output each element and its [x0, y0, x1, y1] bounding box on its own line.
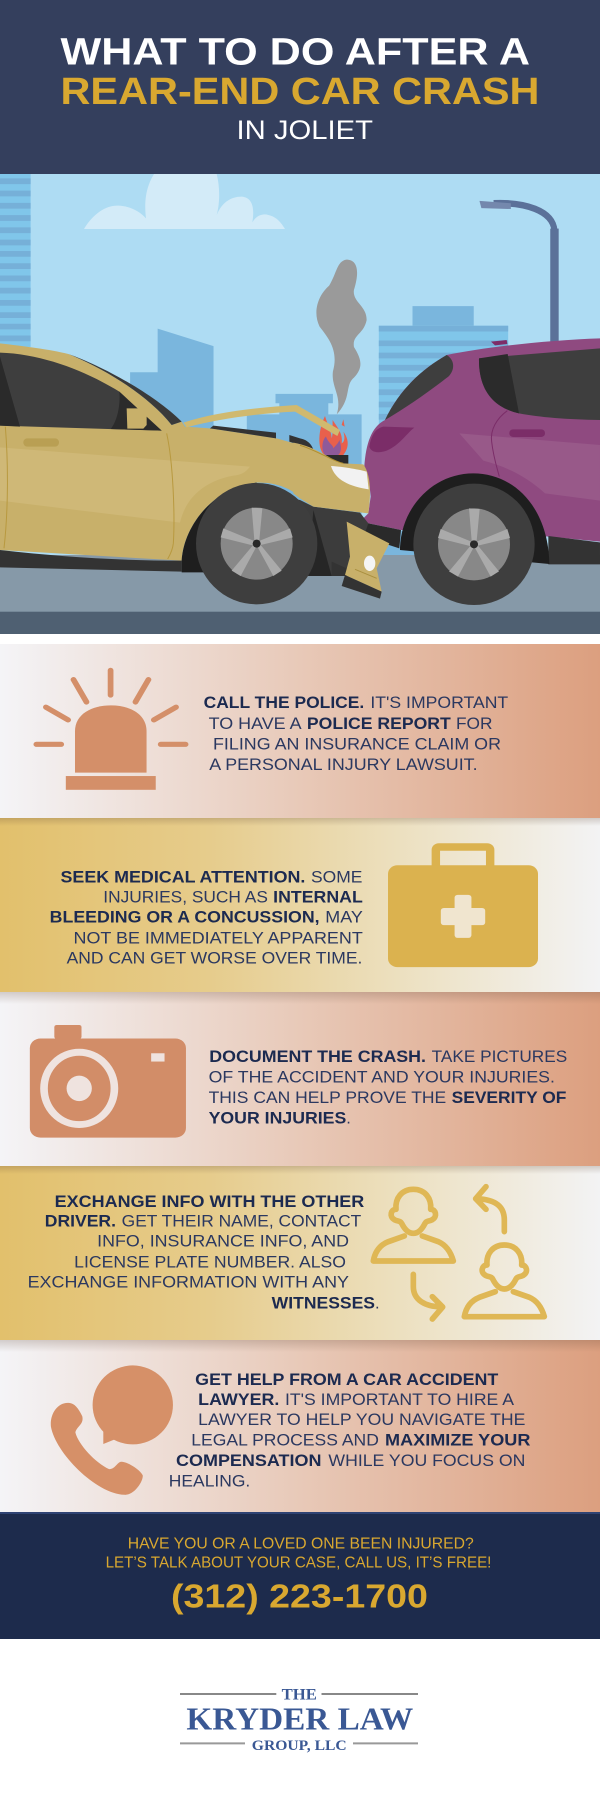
text: seek medical attention: AND CAN GET WORSE OVER TIME.	[67, 949, 362, 967]
icon: siren	[36, 670, 186, 790]
logo: the kryder law group: THE	[282, 1686, 317, 1704]
panel: get help from a lawyer	[0, 1340, 600, 1513]
text: document the crash: TAKE PICTURES	[432, 1048, 567, 1066]
street lamp	[480, 200, 559, 342]
text: seek medical attention: NOT BE IMMEDIATELY APPARENT	[74, 929, 363, 947]
skyline buildings	[0, 173, 508, 555]
text: get help: LEGAL PROCESS AND	[191, 1432, 379, 1450]
call to action text: HAVE YOU OR A LOVED ONE BEEN INJURED?	[128, 1536, 474, 1552]
text: seek medical attention: INTERNAL	[273, 888, 363, 906]
text: call the police: IT'S IMPORTANT	[370, 694, 508, 712]
text: document the crash: YOUR INJURIES	[209, 1110, 346, 1128]
title line 1: WHAT TO DO AFTER A	[60, 32, 530, 74]
text: get help: HEALING.	[169, 1473, 250, 1491]
text: get help: LAWYER TO HELP YOU NAVIGATE THE	[198, 1411, 525, 1429]
text: document the crash: .	[346, 1110, 351, 1128]
cloud	[84, 174, 285, 229]
text: call the police: TO HAVE A	[209, 715, 302, 733]
illustration: crash scene	[0, 173, 600, 634]
text: get help	[169, 1371, 530, 1491]
road	[0, 555, 600, 612]
icon: first aid kit	[388, 847, 538, 967]
text: seek medical attention: INJURIES, SUCH AS	[103, 888, 268, 906]
panel: call the police	[0, 644, 600, 819]
text: exchange info: DRIVER.	[45, 1213, 116, 1231]
text: seek medical attention: BLEEDING OR A CONCUSSION,	[50, 908, 320, 926]
icon: phone and speech bubble	[51, 1365, 173, 1495]
text: exchange info: EXCHANGE INFORMATION WITH ANY	[28, 1274, 349, 1292]
text: get help: COMPENSATION	[176, 1452, 322, 1470]
text: seek medical attention: MAY	[325, 908, 363, 926]
text: exchange info: EXCHANGE INFO WITH THE OTHER	[55, 1193, 364, 1211]
header	[0, 0, 600, 174]
call to action text line 2: LET’S TALK ABOUT YOUR CASE, CALL US, IT’S FREE!	[106, 1555, 491, 1572]
text: seek medical attention	[50, 868, 363, 967]
text: get help: IT'S IMPORTANT TO HIRE A	[285, 1391, 514, 1409]
text: call the police: FILING AN INSURANCE CLAIM OR	[213, 736, 501, 754]
text: get help: WHILE YOU FOCUS ON	[328, 1452, 525, 1470]
panel: seek medical attention	[0, 818, 600, 993]
smoke	[316, 260, 367, 414]
logo: the kryder law group: KRYDER LAW	[186, 1701, 413, 1737]
flames and engine block	[319, 416, 348, 466]
text: call the police: FOR	[456, 715, 493, 733]
text: call the police: CALL THE POLICE.	[204, 694, 364, 712]
call to action band	[0, 1512, 600, 1639]
text: exchange info: INFO, INSURANCE INFO, AND	[97, 1233, 349, 1251]
panel: exchange info	[0, 1166, 600, 1341]
purple car wheel	[413, 484, 535, 605]
subtitle: IN JOLIET	[236, 115, 373, 145]
broken bumper	[342, 522, 389, 599]
panel: document the crash	[0, 992, 600, 1168]
text: call the police: POLICE REPORT	[307, 715, 451, 733]
text: seek medical attention: SOME	[311, 868, 362, 886]
purple car	[360, 338, 600, 605]
text: document the crash: SEVERITY OF	[452, 1089, 566, 1107]
text: document the crash: DOCUMENT THE CRASH.	[209, 1048, 426, 1066]
text: exchange info: .	[375, 1294, 380, 1312]
text: call the police: A PERSONAL INJURY LAWSUIT.	[209, 756, 478, 774]
text: get help: LAWYER.	[198, 1391, 279, 1409]
text: document the crash: OF THE ACCIDENT AND YOUR INJURIES.	[209, 1068, 555, 1086]
text: document the crash	[209, 1048, 567, 1128]
text: exchange info: GET THEIR NAME, CONTACT	[122, 1213, 361, 1231]
text: exchange info	[28, 1193, 380, 1312]
tan car	[0, 317, 389, 604]
icon: two people exchanging info	[373, 1187, 544, 1319]
text: call the police	[204, 694, 508, 774]
text: exchange info: LICENSE PLATE NUMBER. ALSO	[74, 1253, 346, 1271]
logo: the kryder law group: GROUP, LLC	[252, 1738, 347, 1754]
text: seek medical attention: SEEK MEDICAL ATTENTION.	[60, 868, 305, 886]
text: get help: GET HELP FROM A CAR ACCIDENT	[195, 1371, 498, 1389]
tan car front	[293, 442, 390, 599]
tan car wheel	[196, 483, 317, 604]
text: get help: MAXIMIZE YOUR	[385, 1432, 530, 1450]
raised hood	[183, 405, 340, 436]
phone number: (312) 223-1700	[171, 1578, 428, 1614]
title line 2: REAR-END CAR CRASH	[60, 71, 540, 113]
text: document the crash: THIS CAN HELP PROVE THE	[209, 1089, 446, 1107]
logo: the kryder law group	[180, 1686, 418, 1754]
icon: camera	[30, 1025, 186, 1138]
text: exchange info: WITNESSES	[272, 1294, 375, 1312]
